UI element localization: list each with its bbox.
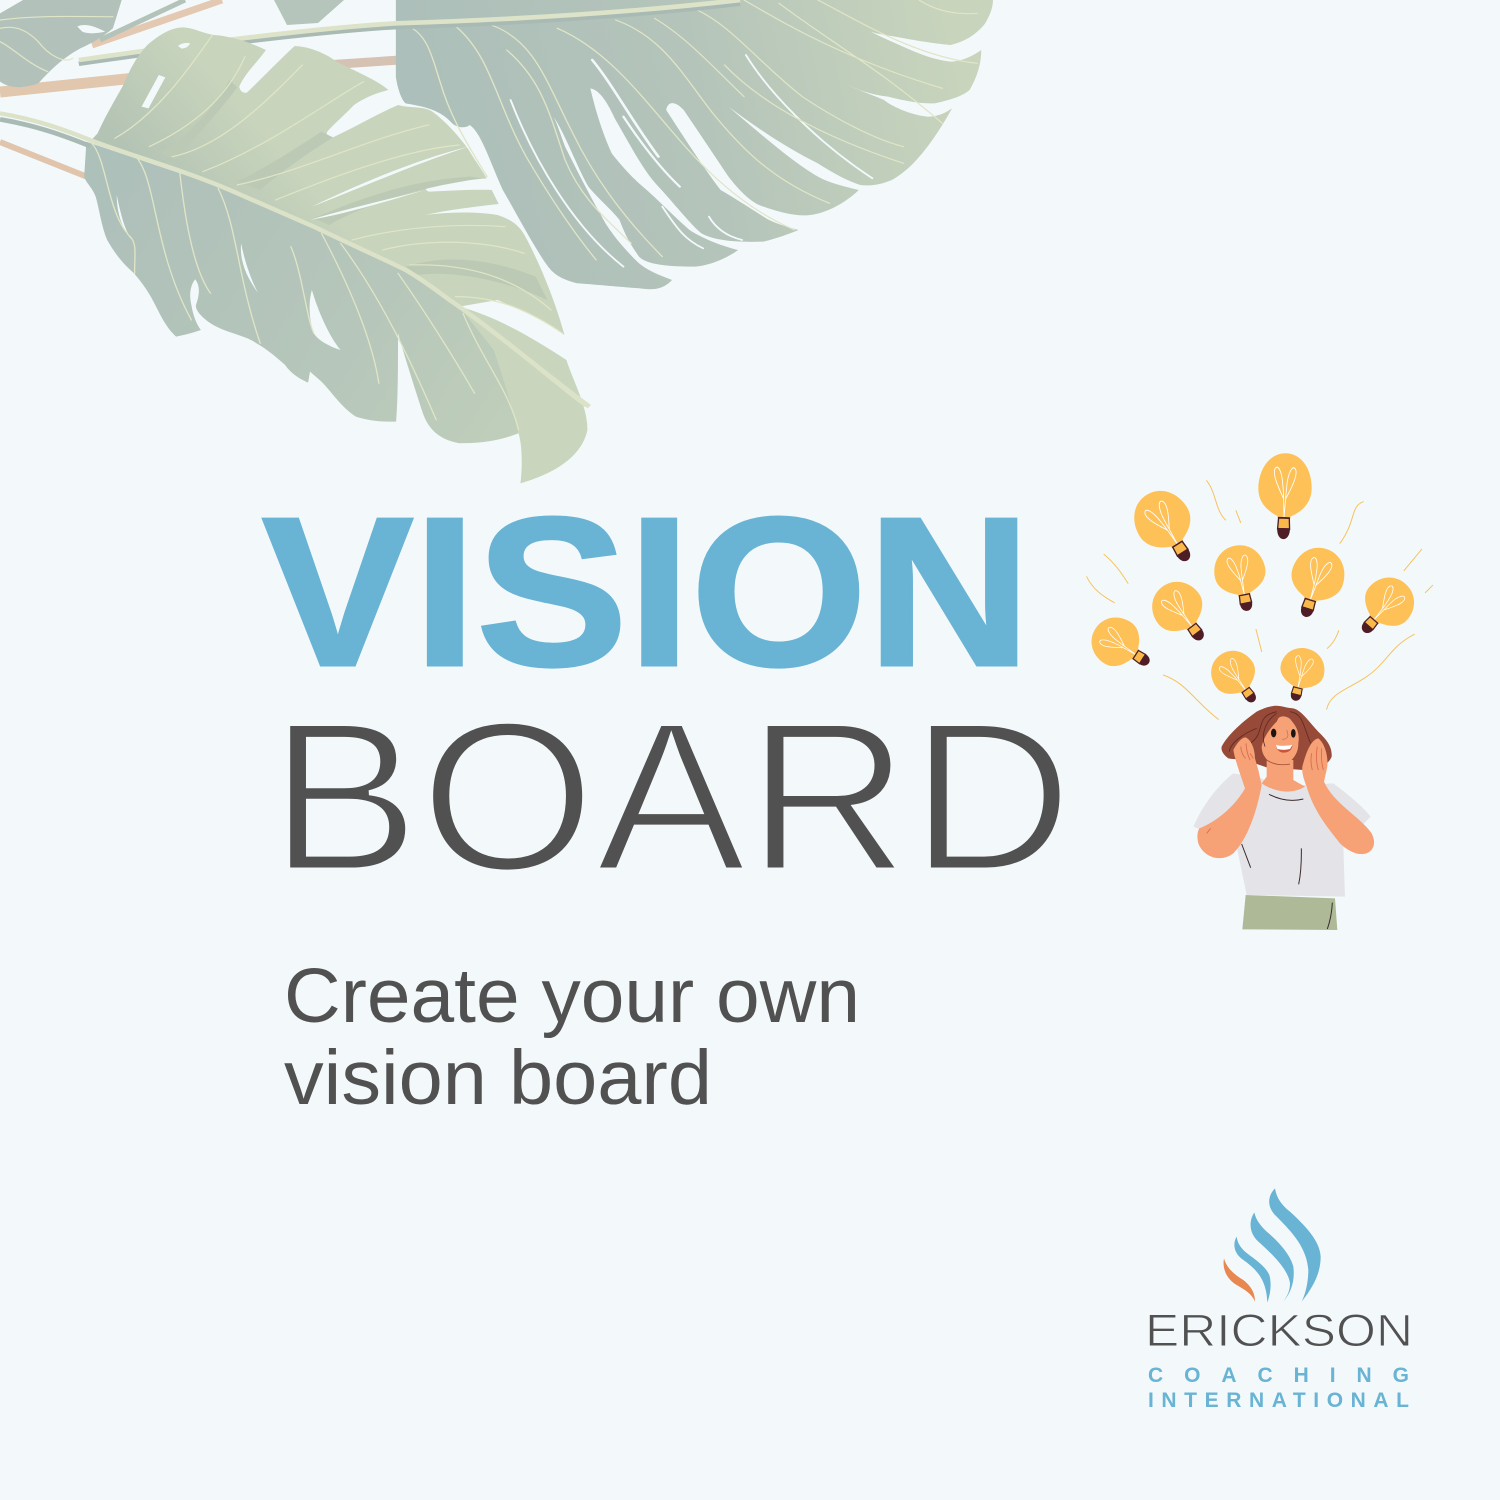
light bulbs: [1082, 452, 1424, 715]
logo wordmark: INTERNATIONAL: INTERNATIONAL: [1148, 1389, 1409, 1412]
hair: [1221, 706, 1332, 770]
title: BOARD: BOARD: [269, 678, 1073, 916]
title: VISION: VISION: [262, 473, 1031, 710]
monstera leaves decoration: [0, 0, 993, 483]
finger lines: [1207, 743, 1323, 833]
lower leaf half: [84, 142, 519, 443]
subtitle: vision board: [284, 1035, 712, 1121]
neck: [1262, 760, 1305, 792]
front leaf midrib: [0, 119, 90, 146]
leaf tone bands: [161, 80, 547, 300]
small top-left leaf: [0, 0, 122, 87]
shirt: [1193, 773, 1371, 897]
idea sparks: [1087, 481, 1433, 719]
front left leaf: [0, 27, 589, 483]
face: [1262, 716, 1299, 765]
subtitle: Create your own: [284, 953, 860, 1039]
left arm: [1197, 737, 1262, 858]
logo wordmark: ERICKSON: ERICKSON: [1145, 1305, 1413, 1356]
large right leaf: [79, 0, 993, 289]
leaf tip: [459, 307, 587, 483]
leaf slits: [511, 55, 872, 267]
skirt: [1242, 895, 1337, 930]
right arm: [1302, 738, 1374, 854]
upper leaf half: [90, 27, 564, 335]
illustration: woman with light bulbs: [1082, 452, 1433, 930]
logo wordmark: COACHING: COACHING: [1148, 1364, 1409, 1387]
large leaf midrib: [79, 4, 740, 64]
leaf veins: [409, 0, 977, 260]
leaf veins: [92, 35, 586, 430]
flame mark: [1224, 1188, 1321, 1303]
logo: Erickson Coaching International: [1145, 1188, 1413, 1412]
small top-centre leaf: [274, 0, 344, 25]
leaf holes: [117, 43, 469, 350]
hair strands: [1229, 712, 1311, 752]
peach leaf stems: [0, 0, 400, 178]
woman: [1193, 706, 1374, 930]
